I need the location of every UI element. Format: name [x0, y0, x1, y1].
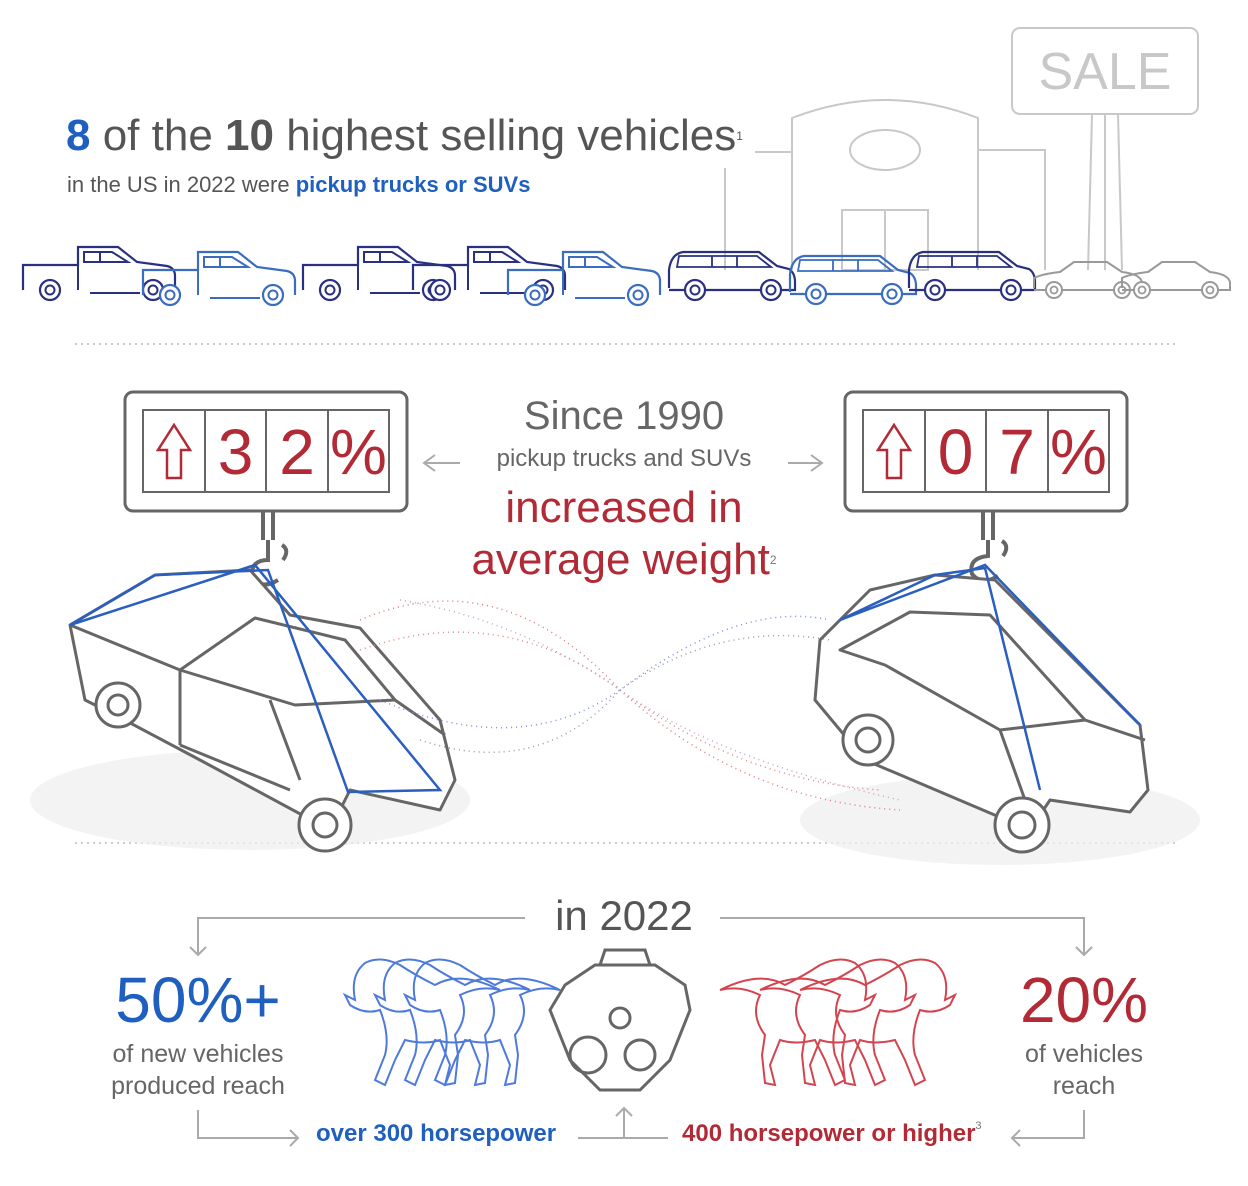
- shadows: [30, 750, 470, 850]
- dotted waves: [360, 600, 900, 810]
- hooks: [252, 511, 1006, 585]
- counter left: [218, 416, 387, 488]
- counters: [125, 392, 1127, 511]
- SALE: SALE: [1038, 43, 1171, 101]
- engine: [550, 950, 690, 1090]
- stat right: 20%: [1020, 964, 1148, 1036]
- stat left: produced reach: [111, 1072, 285, 1100]
- stat left: of new vehicles: [113, 1040, 283, 1068]
- center text: pickup trucks and SUVs: [497, 445, 751, 472]
- counter left: %: [330, 416, 387, 488]
- counter left: 2: [279, 416, 315, 488]
- stat left: [111, 964, 285, 1100]
- pickup big: [70, 570, 455, 851]
- dealership: [725, 28, 1198, 270]
- counter right: 7: [999, 416, 1035, 488]
- text: 400 horsepower or higher3: [682, 1120, 982, 1147]
- center text: average weight2: [471, 535, 777, 584]
- stat left: 50%+: [115, 964, 281, 1036]
- horses blue: [345, 959, 560, 1085]
- subtitle: in the US in 2022 were pickup trucks or SUVs: [67, 172, 530, 197]
- center text: Since 1990: [524, 394, 724, 438]
- counter right: 0: [938, 416, 973, 488]
- center text: increased in: [505, 483, 743, 532]
- stat right: [1020, 964, 1148, 1100]
- horses red: [720, 959, 955, 1085]
- counter left: 3: [218, 416, 253, 488]
- in 2022: in 2022: [555, 892, 693, 939]
- stat right: of vehicles: [1025, 1040, 1143, 1068]
- in 2022 lines: [190, 918, 1092, 1146]
- counter right: [938, 416, 1107, 488]
- stat right: reach: [1053, 1072, 1115, 1100]
- counter right: %: [1050, 416, 1107, 488]
- title: 8 of the 10 highest selling vehicles1: [66, 111, 743, 160]
- vehicles row: [23, 247, 175, 300]
- suv big: [815, 575, 1148, 852]
- center text: [471, 394, 777, 584]
- bottom labels: over 300 horsepower: [316, 1120, 556, 1147]
